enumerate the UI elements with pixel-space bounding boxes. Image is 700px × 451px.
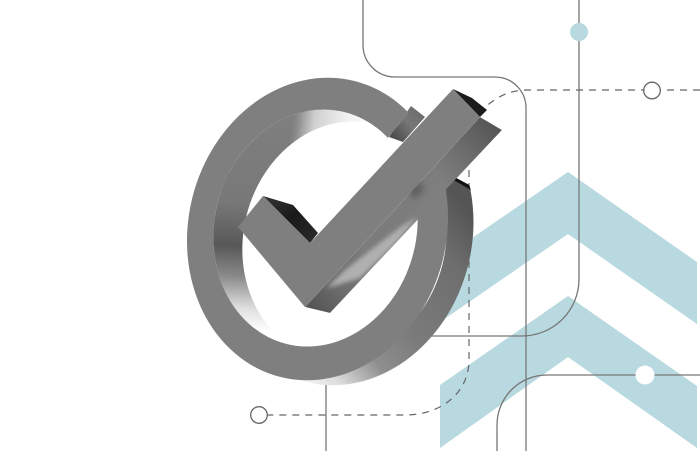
- ring: cut end strip: [389, 106, 425, 142]
- upper chevron: [440, 172, 697, 324]
- tick: front face: [238, 89, 480, 307]
- tick: inner dark wall: [263, 196, 318, 243]
- ring: black top edge: [447, 173, 471, 190]
- ring: front face: [187, 78, 448, 380]
- circuit line: vertical with rounded return: [425, 0, 579, 336]
- ring: outer extrusion: [213, 173, 474, 386]
- shading where ring meets tick: [408, 180, 424, 200]
- circuit line: top rounded path: [363, 0, 526, 451]
- tick: dark end wall: [453, 89, 487, 117]
- circuit line: bottom rounded path: [497, 375, 700, 451]
- dashed line: upper right: [482, 90, 700, 110]
- ring: opening: [218, 100, 471, 380]
- open node: lower left: [251, 407, 267, 423]
- lower chevron: [440, 296, 697, 448]
- tick: side wall: [305, 117, 502, 313]
- dashed line: lower left: [268, 170, 469, 415]
- open node: upper right: [644, 82, 660, 99]
- 3D check mark icon: [187, 78, 502, 386]
- infographic canvas: [187, 0, 700, 451]
- circuit line: short vertical below ring: [325, 380, 327, 451]
- teal node: [570, 23, 588, 41]
- white node: [636, 366, 654, 384]
- ring: inner wall: [213, 110, 370, 344]
